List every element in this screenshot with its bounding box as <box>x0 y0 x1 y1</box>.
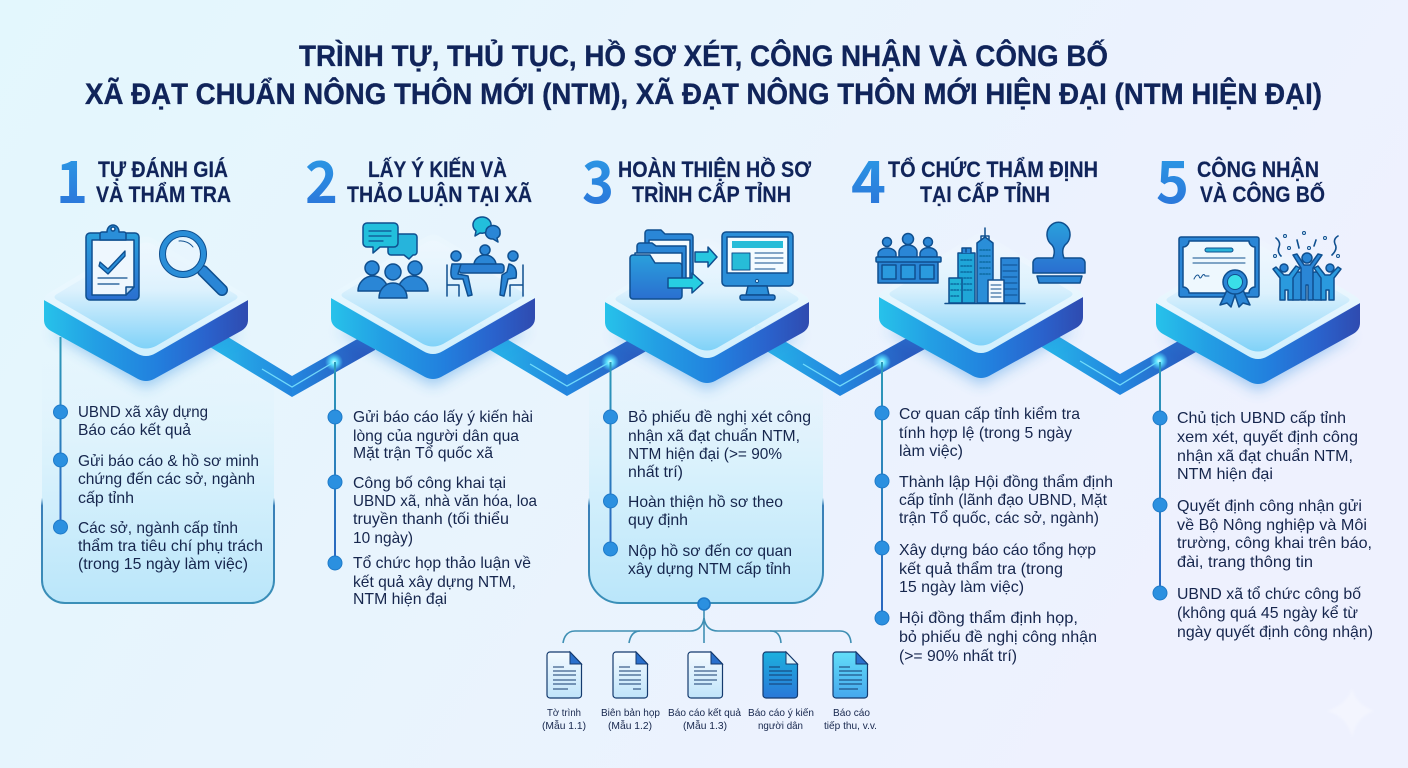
icon: city buildings <box>945 228 1025 304</box>
step 2 heading: THẢO LUẬN TẠI XÃ <box>347 182 532 207</box>
step 5 heading: 5 <box>1156 136 1189 220</box>
step 5 heading <box>1156 136 1325 220</box>
text: step 5 bullets: ngày quyết định công nhận) <box>1177 624 1373 641</box>
text: step 5 bullets <box>1177 410 1373 641</box>
document: Báo cáo kết quả: (Mẫu 1.3) <box>683 719 727 732</box>
text: step 1 bullets: chứng đến các sở, ngành <box>78 471 255 488</box>
text: step 2 bullets: kết quả xây dựng NTM, <box>353 574 516 591</box>
text: step 2 bullets: Tổ chức họp thảo luận về <box>353 554 531 572</box>
text: step 1 bullets: Gửi báo cáo & hồ sơ minh <box>78 453 259 470</box>
text: step 5 bullets: Quyết định công nhận gửi <box>1177 498 1362 515</box>
text: step 4 bullets: Thành lập Hội đồng thẩm định <box>899 473 1113 491</box>
title: XÃ ĐẠT CHUẨN NÔNG THÔN MỚI (NTM), XÃ ĐẠT NÔNG THÔN MỚI HIỆN ĐẠI (NTM HIỆN ĐẠI) <box>85 77 1322 111</box>
step 3 heading: TRÌNH CẤP TỈNH <box>632 182 791 207</box>
text: step 2 bullets: truyền thanh (tối thiểu <box>353 510 509 528</box>
step 4 heading: 4 <box>851 136 886 220</box>
step 3 heading: HOÀN THIỆN HỒ SƠ <box>618 157 811 182</box>
title: TRÌNH TỰ, THỦ TỤC, HỒ SƠ XÉT, CÔNG NHẬN VÀ CÔNG BỐ <box>299 39 1108 73</box>
document tree connector <box>563 598 851 643</box>
document: Báo cáo kết quả <box>668 652 741 732</box>
step 2 heading <box>305 136 532 220</box>
text: step 1 bullets: Báo cáo kết quả <box>78 422 191 439</box>
platform 3 <box>605 238 809 390</box>
text: step 3 bullets: nhận xã đạt chuẩn NTM, <box>628 427 800 445</box>
text: step 2 bullets: NTM hiện đại <box>353 591 447 608</box>
step 2 heading: LẤY Ý KIẾN VÀ <box>368 157 507 182</box>
text: step 2 bullets: Công bố công khai tại <box>353 475 506 492</box>
step 1 heading: VÀ THẨM TRA <box>96 182 231 207</box>
icon: certificate <box>1179 237 1259 307</box>
text: step 4 bullets: làm việc) <box>899 443 963 460</box>
text: step 1 bullets: cấp tỉnh <box>78 490 134 507</box>
timeline: step 4 <box>875 362 889 625</box>
timeline: step 2 <box>328 362 342 570</box>
text: step 3 bullets <box>628 409 811 578</box>
icon: magnifier <box>160 230 222 290</box>
step 3 heading: 3 <box>582 136 614 220</box>
text: step 5 bullets: đài, trang thông tin <box>1177 554 1313 571</box>
text: step 2 bullets: Gửi báo cáo lấy ý kiến hài <box>353 409 533 426</box>
title <box>85 39 1322 111</box>
text: step 4 bullets: cấp tỉnh (lãnh đạo UBND, Mặt <box>899 492 1108 509</box>
document: Báo cáo tiếp thu: Báo cáo <box>833 707 870 719</box>
text: step 1 bullets: UBND xã xây dựng <box>78 404 208 421</box>
text: step 3 bullets: NTM hiện đại (>= 90% <box>628 446 782 463</box>
text: step 5 bullets: (không quá 45 ngày kể từ <box>1177 604 1358 622</box>
text: step 4 bullets <box>899 405 1113 665</box>
text: step 2 bullets: 10 ngày) <box>353 530 413 547</box>
icon: appraisal council <box>876 234 941 283</box>
icon: stamp <box>1033 222 1085 283</box>
step 1 heading: 1 <box>56 136 88 220</box>
text: step 4 bullets: kết quả thẩm tra (trong <box>899 560 1063 578</box>
document: Báo cáo ý kiến người dân <box>748 652 814 732</box>
text: step 4 bullets: Xây dựng báo cáo tổng hợp <box>899 541 1096 559</box>
platform 5 <box>1156 240 1360 391</box>
step 4 heading: TỔ CHỨC THẨM ĐỊNH <box>888 157 1098 182</box>
text: step 4 bullets: 15 ngày làm việc) <box>899 579 1024 596</box>
step 5 heading: CÔNG NHẬN <box>1197 157 1319 182</box>
text: step 1 bullets <box>78 404 263 573</box>
platform 1 <box>44 236 248 388</box>
text: step 5 bullets: NTM hiện đại <box>1177 466 1273 483</box>
step 2 heading: 2 <box>305 136 338 220</box>
step 1 heading <box>56 136 231 220</box>
panel: step 3 text box <box>589 340 823 603</box>
step 3 heading <box>582 136 811 220</box>
document: Tờ trình <box>542 652 586 732</box>
document: Biên bản họp: (Mẫu 1.2) <box>608 719 652 732</box>
document: Biên bản họp <box>601 652 660 732</box>
text: step 1 bullets: Các sở, ngành cấp tỉnh <box>78 520 238 537</box>
icon: sparkle watermark <box>1327 688 1374 737</box>
connector ribbon between platforms <box>205 322 1203 397</box>
step 5 heading: VÀ CÔNG BỐ <box>1200 181 1325 207</box>
text: step 3 bullets: Nộp hồ sơ đến cơ quan <box>628 543 792 560</box>
timeline: step 3 <box>604 362 618 556</box>
text: step 2 bullets: Mặt trận Tổ quốc xã <box>353 444 493 462</box>
text: step 2 bullets: UBND xã, nhà văn hóa, loa <box>353 493 537 510</box>
document: Tờ trình: Tờ trình <box>547 707 581 719</box>
text: step 4 bullets: bỏ phiếu đề nghị công nhận <box>899 629 1097 646</box>
text: step 3 bullets: Bỏ phiếu đề nghị xét công <box>628 409 811 426</box>
text: step 5 bullets: xem xét, quyết định công <box>1177 429 1358 446</box>
document: Báo cáo ý kiến người dân: Báo cáo ý kiến <box>748 707 814 719</box>
document: Biên bản họp: Biên bản họp <box>601 707 660 719</box>
panel: step 1 text box <box>42 340 274 603</box>
document: Báo cáo tiếp thu: tiếp thu, v.v. <box>824 720 877 732</box>
step 4 heading: TẠI CẤP TỈNH <box>920 182 1050 207</box>
text: step 5 bullets: Chủ tịch UBND cấp tỉnh <box>1177 410 1346 427</box>
text: step 2 bullets <box>353 409 537 608</box>
text: step 5 bullets: trường, công khai trên báo, <box>1177 535 1372 552</box>
icon: folders <box>630 230 717 299</box>
document: Báo cáo tiếp thu <box>824 652 877 732</box>
text: step 3 bullets: xây dựng NTM cấp tỉnh <box>628 561 791 578</box>
text: step 5 bullets: UBND xã tổ chức công bố <box>1177 585 1361 603</box>
timeline: step 1 <box>54 337 68 534</box>
icon: discussion group <box>358 223 428 298</box>
platform 4 <box>879 234 1083 385</box>
step 1 heading: TỰ ĐÁNH GIÁ <box>98 157 228 182</box>
step 4 heading <box>851 136 1098 220</box>
text: step 2 bullets: lòng của người dân qua <box>353 428 519 445</box>
text: step 4 bullets: (>= 90% nhất trí) <box>899 648 1017 665</box>
text: step 4 bullets: trận Tổ quốc, các sở, ngành) <box>899 509 1099 527</box>
text: step 4 bullets: Hội đồng thẩm định họp, <box>899 609 1078 627</box>
text: step 5 bullets: về Bộ Nông nghiệp và Môi <box>1177 517 1367 534</box>
icon: celebration <box>1273 232 1341 300</box>
document: Báo cáo ý kiến người dân: người dân <box>758 720 803 732</box>
document: Tờ trình: (Mẫu 1.1) <box>542 719 586 732</box>
timeline: step 5 <box>1153 362 1167 600</box>
text: step 3 bullets: quy định <box>628 512 688 529</box>
icon: clipboard <box>86 225 139 300</box>
text: step 4 bullets: Cơ quan cấp tỉnh kiểm tra <box>899 405 1080 423</box>
text: step 1 bullets: thẩm tra tiêu chí phụ trách <box>78 537 263 555</box>
platform 2 <box>331 234 535 386</box>
text: step 3 bullets: nhất trí) <box>628 464 683 481</box>
text: step 5 bullets: nhận xã đạt chuẩn NTM, <box>1177 447 1353 465</box>
document: Báo cáo kết quả: Báo cáo kết quả <box>668 707 741 719</box>
icon: monitor <box>722 232 793 300</box>
text: step 1 bullets: (trong 15 ngày làm việc) <box>78 556 248 573</box>
text: step 3 bullets: Hoàn thiện hồ sơ theo <box>628 494 783 511</box>
text: step 4 bullets: tính hợp lệ (trong 5 ngày <box>899 425 1072 442</box>
icon: meeting table <box>447 217 523 296</box>
box outlines <box>42 340 823 603</box>
